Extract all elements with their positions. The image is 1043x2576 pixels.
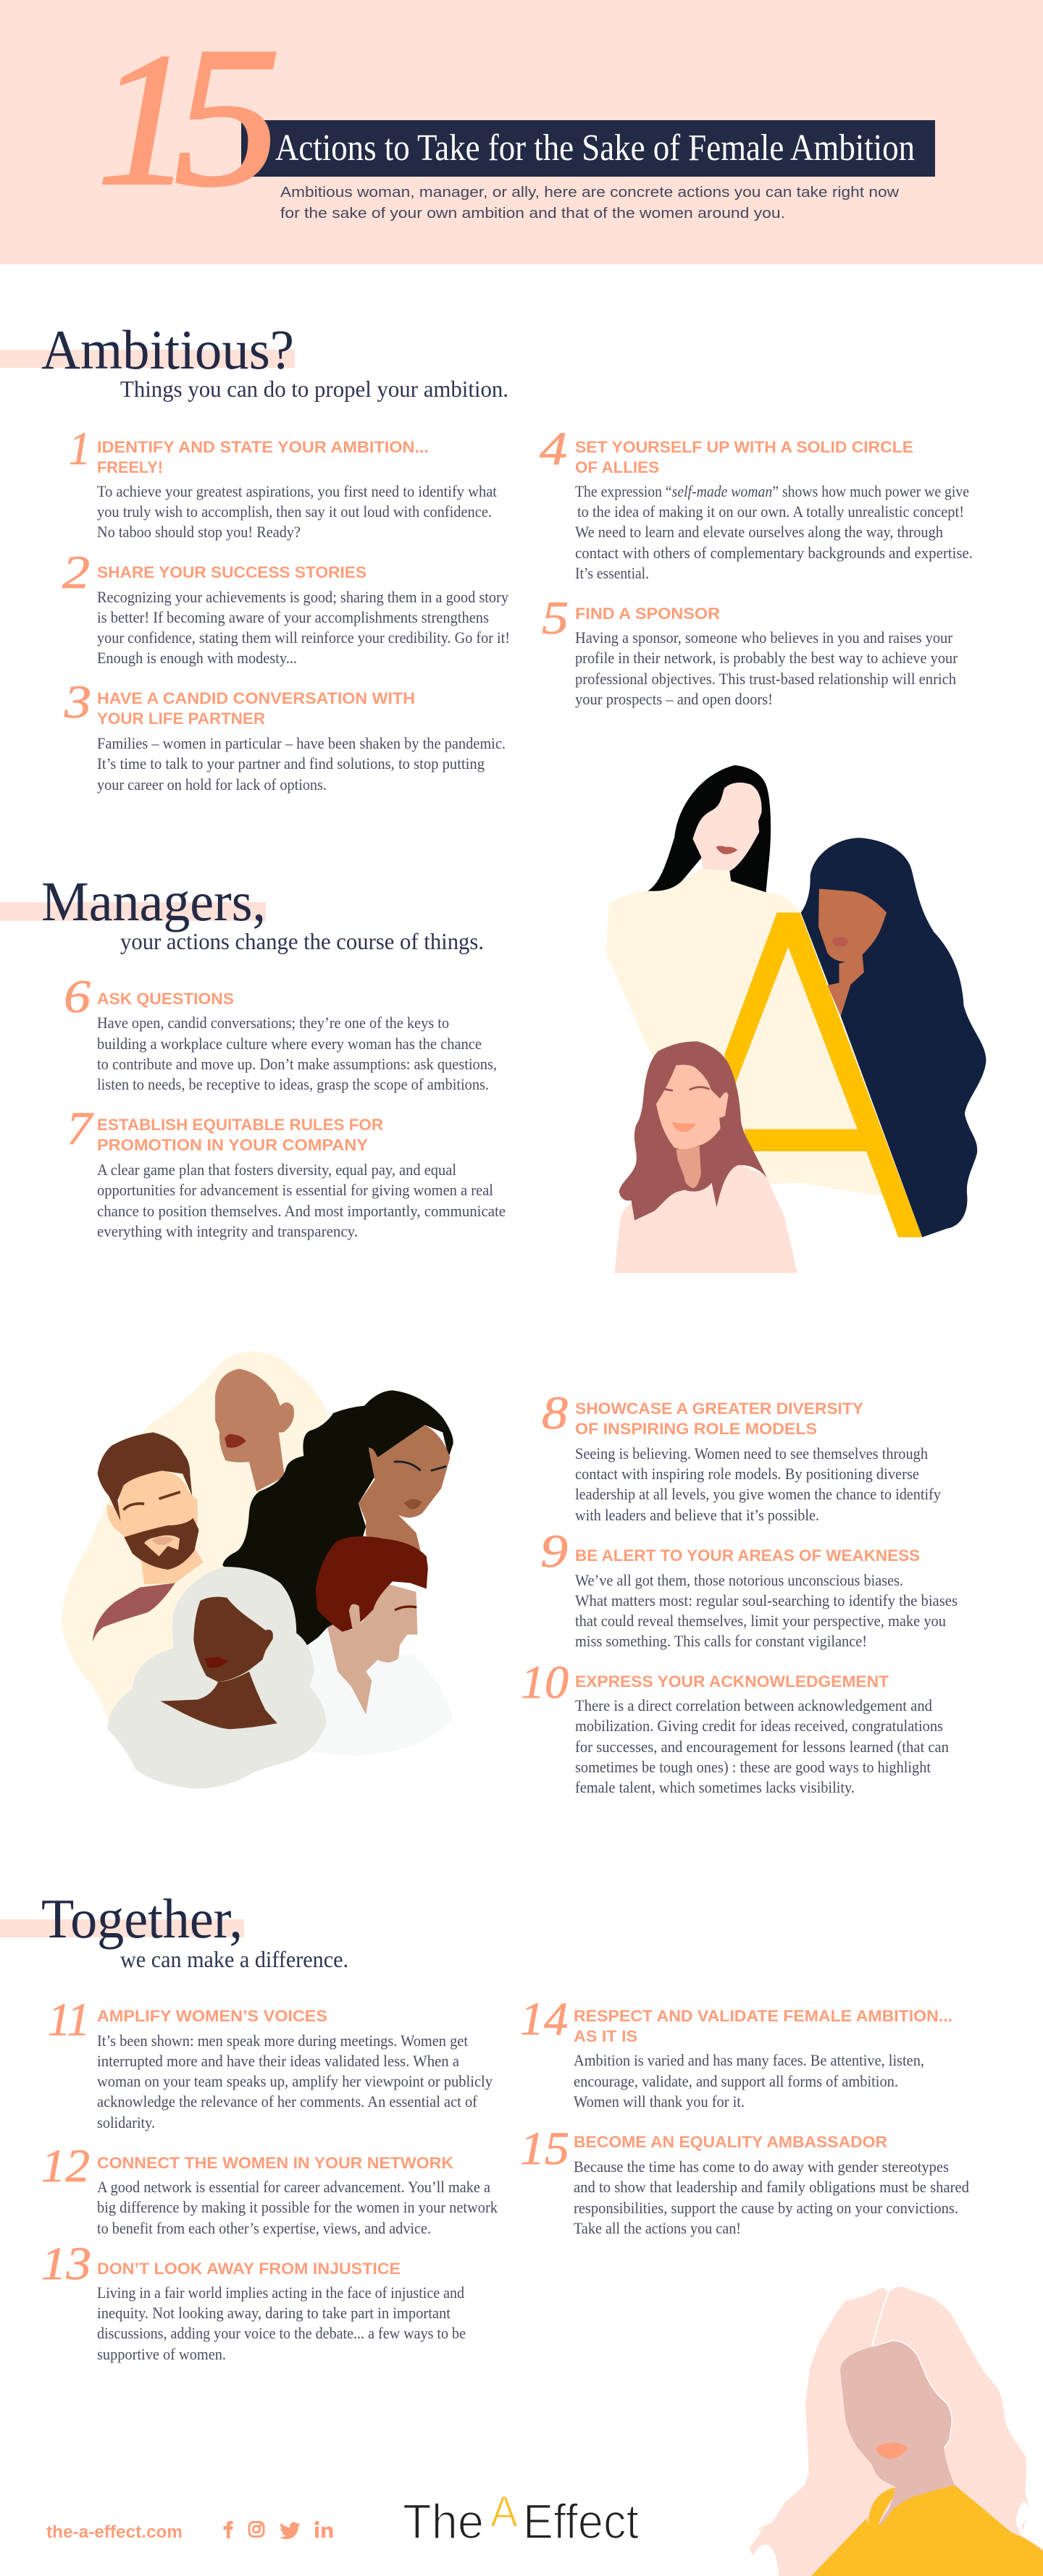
action 4 (540, 423, 973, 582)
body 8: with leaders and believe that it’s possible. (575, 1506, 819, 1524)
body 6: to contribute and move up. Don’t make assumptions: ask questions, (97, 1055, 497, 1073)
body 5: profile in their network, is probably the best way to achieve your (575, 649, 958, 667)
body 12: big difference by making it possible for the women in your network (97, 2198, 498, 2216)
heading 15: BECOME AN EQUALITY AMBASSADOR (574, 2133, 887, 2151)
body 4: The expression “self-made woman” shows how much power we give (575, 482, 969, 500)
footer (46, 2487, 639, 2549)
body 11: acknowledge the relevance of her comments. An essential act of (97, 2092, 478, 2110)
big number 15 (97, 6, 281, 227)
navy hair (801, 838, 986, 1237)
man face (107, 1470, 204, 1584)
body 1: No taboo should stop you! Ready? (97, 523, 301, 541)
heading 1 (97, 438, 429, 476)
body 6: Have open, candid conversations; they’re one of the keys to (97, 1014, 449, 1032)
body 9: miss something. This calls for constant vigilance! (575, 1632, 867, 1650)
heading 9: BE ALERT TO YOUR AREAS OF WEAKNESS (575, 1546, 920, 1565)
number 6: 6 (64, 971, 91, 1023)
heading 4 (575, 438, 913, 476)
rose hair (619, 1041, 767, 1221)
body 7: chance to position themselves. And most importantly, communicate (97, 1202, 506, 1220)
body 14 (574, 2051, 924, 2110)
number 14: 14 (520, 1993, 568, 2045)
heading 12: CONNECT THE WOMEN IN YOUR NETWORK (97, 2154, 453, 2172)
action 3 (64, 676, 506, 794)
big number 15: 5 (174, 6, 281, 227)
title: Actions to Take for the Sake of Female Ambition (275, 127, 915, 169)
action 14 (520, 1993, 952, 2110)
body 15: Because the time has come to do away with gender stereotypes (574, 2158, 949, 2176)
body 5: Having a sponsor, someone who believes in you and raises your (575, 628, 953, 647)
redhead ear (349, 1604, 361, 1630)
number 8: 8 (542, 1387, 568, 1439)
website: the-a-effect.com (46, 2522, 183, 2542)
action 15 (520, 2123, 969, 2237)
heading 8 (575, 1399, 863, 1438)
red hair (316, 1536, 428, 1632)
man beard (124, 1518, 199, 1570)
logo: The A Effect (403, 2487, 639, 2549)
man hair (98, 1432, 192, 1521)
action 9 (540, 1525, 958, 1650)
heading 13: DON’T LOOK AWAY FROM INJUSTICE (97, 2260, 401, 2278)
action 12 (41, 2140, 498, 2237)
body 2: is better! If becoming aware of your accomplishments strengthens (97, 608, 489, 626)
action 5 (542, 592, 958, 708)
lips (672, 1122, 696, 1132)
body 6: listen to needs, be receptive to ideas, grasp the scope of ambitions. (97, 1075, 489, 1093)
body 11: solidarity. (97, 2113, 155, 2131)
lips (716, 846, 737, 854)
face outline highlight (872, 2341, 952, 2449)
number 12: 12 (41, 2140, 90, 2192)
body 13 (97, 2284, 466, 2363)
body 2 (97, 588, 510, 667)
body 7: opportunities for advancement is essential for giving women a real (97, 1181, 493, 1199)
body 12 (97, 2178, 498, 2237)
body 1 (97, 482, 497, 541)
peach face (656, 1065, 729, 1149)
number 7: 7 (67, 1103, 94, 1155)
body 10: There is a direct correlation between acknowledgement and (575, 1696, 932, 1714)
heading 6: ASK QUESTIONS (97, 990, 234, 1008)
body 8: leadership at all levels, you give women the chance to identify (575, 1485, 941, 1503)
intro text: for the sake of your own ambition and that of the women around you. (280, 205, 785, 222)
face and neck (840, 2341, 956, 2525)
body 6: building a workplace culture where every woman has the chance (97, 1035, 482, 1053)
number 10: 10 (521, 1657, 569, 1709)
black hair (648, 765, 771, 892)
number 2: 2 (62, 547, 90, 599)
body 6 (97, 1014, 497, 1093)
logo: The A Effect: A (490, 2487, 518, 2536)
heading 10: EXPRESS YOUR ACKNOWLEDGEMENT (575, 1672, 889, 1691)
heading: Managers,: Managers, (41, 870, 266, 933)
dark neck and shoulders (161, 1672, 277, 1729)
heading: Ambitious?: Ambitious? (41, 319, 294, 381)
action 6 (64, 971, 497, 1093)
lips (876, 2442, 908, 2459)
heading 1: FREELY! (97, 458, 163, 476)
icon: twitter (280, 2522, 301, 2539)
number 13: 13 (41, 2238, 91, 2290)
dark lips (205, 1657, 228, 1668)
illustration: three women and letter A (606, 765, 986, 1273)
heading: Together,: Together, (41, 1887, 243, 1950)
beard gap (144, 1536, 180, 1557)
hair parting (872, 2291, 889, 2346)
body 7: A clear game plan that fosters diversity, equal pay, and equal (97, 1161, 456, 1179)
body 12: to benefit from each other’s expertise, views, and advice. (97, 2219, 431, 2237)
black hair (222, 1390, 453, 1646)
action 7 (67, 1103, 506, 1240)
silver hair (107, 1567, 326, 1789)
action 1 (69, 423, 497, 541)
heading 5: FIND A SPONSOR (575, 605, 720, 623)
heading 14 (574, 2007, 952, 2045)
heading 8: OF INSPIRING ROLE MODELS (575, 1420, 817, 1438)
woman lips (403, 1499, 422, 1510)
body 3 (97, 734, 506, 794)
body 8: Seeing is believing. Women need to see themselves through (575, 1444, 928, 1462)
body 14: Women will thank you for it. (574, 2092, 745, 2110)
body 2: Recognizing your achievements is good; sharing them in a good story (97, 588, 508, 606)
body 12: A good network is essential for career advancement. You’ll make a (97, 2178, 490, 2196)
body 15: responsibilities, support the cause by acting on your convictions. (574, 2199, 958, 2217)
cream body (606, 869, 887, 1196)
body 9: We’ve all got them, those notorious unconscious biases. (575, 1571, 903, 1589)
neck (676, 1146, 701, 1188)
white shirt (309, 1628, 453, 1756)
body 10: for successes, and encouragement for lessons learned (that can (575, 1738, 949, 1756)
body 3: your career on hold for lack of options. (97, 775, 327, 794)
heading highlight band (0, 350, 295, 368)
redhead eyebrow (395, 1607, 416, 1610)
woman eyebrows (394, 1462, 446, 1470)
body 10: sometimes be tough ones) : these are good ways to highlight (575, 1758, 931, 1776)
body 13: inequity. Not looking away, daring to take part in important (97, 2304, 451, 2322)
body 5 (575, 628, 958, 708)
subheading: your actions change the course of things. (120, 928, 484, 954)
big number 15: 1 (97, 14, 192, 224)
action 13 (41, 2238, 466, 2363)
illustration: group of five faces (62, 1351, 453, 1789)
body 15 (574, 2158, 969, 2237)
body 7 (97, 1161, 506, 1240)
number 5: 5 (542, 592, 569, 644)
illustration: blonde woman in yellow top (750, 2286, 1043, 2576)
action 11 (48, 1994, 493, 2131)
cream backdrop (62, 1351, 327, 1727)
body 4: We need to learn and elevate ourselves along the way, through (575, 523, 943, 541)
body 5: professional objectives. This trust-based relationship will enrich (575, 670, 956, 688)
intro text: Ambitious woman, manager, or ally, here are concrete actions you can take right now (280, 184, 899, 201)
man eyebrows (124, 1492, 180, 1510)
yellow top (811, 2485, 1043, 2576)
icon: instagram (249, 2522, 264, 2537)
action 2 (62, 547, 510, 667)
number 1: 1 (69, 423, 91, 475)
body 15: Take all the actions you can! (574, 2219, 741, 2237)
body 3: It’s time to talk to your partner and find solutions, to stop putting (97, 754, 485, 773)
body 10 (575, 1696, 949, 1796)
heading 7 (97, 1116, 383, 1154)
body 1: you truly wish to accomplish, then say it out loud with confidence. (97, 502, 492, 521)
heading 8: SHOWCASE A GREATER DIVERSITY (575, 1399, 863, 1418)
heading 11: AMPLIFY WOMEN’S VOICES (97, 2007, 327, 2025)
hair gap (1016, 2501, 1030, 2535)
body 11: It’s been shown: men speak more during meetings. Women get (97, 2032, 468, 2050)
body 14: Ambition is varied and has many faces. Be attentive, listen, (574, 2051, 924, 2069)
body 11: interrupted more and have their ideas validated less. When a (97, 2052, 459, 2070)
header panel (0, 0, 1043, 264)
heading highlight band (0, 902, 266, 921)
body 8 (575, 1444, 941, 1524)
shirt (615, 1163, 797, 1273)
icon: linkedin (314, 2521, 333, 2538)
number 9: 9 (540, 1525, 568, 1578)
number 15: 15 (520, 2123, 569, 2175)
section: Ambitious (0, 319, 973, 794)
body 2: your confidence, stating them will reinforce your credibility. Go for it! (97, 628, 510, 647)
body 4: to the idea of making it on our own. A totally unrealistic concept! (577, 502, 964, 521)
body 9 (575, 1571, 958, 1650)
body 13: supportive of women. (97, 2345, 226, 2363)
body 13: Living in a fair world implies acting in the face of injustice and (97, 2284, 464, 2302)
body 10: mobilization. Giving credit for ideas received, congratulations (575, 1717, 943, 1735)
body 5: your prospects – and open doors! (575, 690, 773, 708)
body 4: It’s essential. (575, 564, 649, 582)
body 4 (575, 482, 973, 582)
section: allies actions (521, 1387, 958, 1796)
body 3: Families – women in particular – have been shaken by the pandemic. (97, 734, 506, 752)
subheading: we can make a difference. (120, 1946, 348, 1972)
heading 3: HAVE A CANDID CONVERSATION WITH (97, 689, 415, 707)
eyebrows (664, 1087, 709, 1090)
body 4: contact with others of complementary backgrounds and expertise. (575, 544, 973, 562)
section: Managers (0, 870, 506, 1240)
man lips (151, 1537, 174, 1545)
body 8: contact with inspiring role models. By positioning diverse (575, 1465, 919, 1483)
logo: The A Effect: Effect (523, 2494, 639, 2549)
lips (225, 1434, 246, 1448)
heading 14: AS IT IS (574, 2027, 637, 2045)
section: Together (0, 1887, 969, 2363)
body 9: What matters most: regular soul-searching to identify the biases (575, 1591, 958, 1609)
action 8 (542, 1387, 941, 1524)
title bar (241, 120, 935, 177)
number 3: 3 (64, 676, 91, 728)
body 7: everything with integrity and transparency. (97, 1222, 358, 1240)
woman face (359, 1425, 450, 1551)
heading 4: SET YOURSELF UP WITH A SOLID CIRCLE (575, 438, 913, 456)
body 11 (97, 2032, 493, 2131)
lips (832, 937, 848, 947)
heading 4: OF ALLIES (575, 458, 659, 476)
body 1: To achieve your greatest aspirations, you first need to identify what (97, 482, 497, 500)
heading 3: YOUR LIFE PARTNER (97, 710, 265, 728)
body 15: and to show that leadership and family obligations must be shared (574, 2178, 969, 2196)
body 10: female talent, which sometimes lacks visibility. (575, 1778, 855, 1796)
heading 7: PROMOTION IN YOUR COMPANY (97, 1136, 368, 1154)
subheading: Things you can do to propel your ambition. (120, 376, 508, 402)
logo: The A Effect: The (403, 2494, 484, 2549)
heading 3 (97, 689, 415, 728)
heading 14: RESPECT AND VALIDATE FEMALE AMBITION... (574, 2007, 952, 2025)
brown face (818, 889, 887, 1016)
heading highlight band (0, 1919, 244, 1937)
bald head (215, 1369, 294, 1491)
dark face (193, 1596, 273, 1682)
heading 2: SHARE YOUR SUCCESS STORIES (97, 563, 366, 581)
yellow letter A (724, 913, 922, 1237)
body 11: woman on your team speaks up, amplify her viewpoint or publicly (97, 2072, 493, 2090)
body 13: discussions, adding your voice to the debate... a few ways to be (97, 2324, 466, 2342)
heading 7: ESTABLISH EQUITABLE RULES FOR (97, 1116, 383, 1134)
body 2: Enough is enough with modesty... (97, 649, 297, 667)
number 11: 11 (48, 1994, 90, 2046)
body 9: that could reveal themselves, limit your perspective, make you (575, 1612, 946, 1630)
redhead skin (327, 1583, 418, 1714)
heading 1: IDENTIFY AND STATE YOUR AMBITION... (97, 438, 429, 456)
number 4: 4 (540, 423, 567, 475)
hair (750, 2286, 1043, 2576)
action 10 (521, 1657, 949, 1796)
man shirt (93, 1583, 175, 1642)
body 14: encourage, validate, and support all forms of ambition. (574, 2072, 898, 2090)
intro text (280, 184, 899, 222)
pale face (692, 783, 762, 871)
icon: facebook (223, 2521, 233, 2538)
